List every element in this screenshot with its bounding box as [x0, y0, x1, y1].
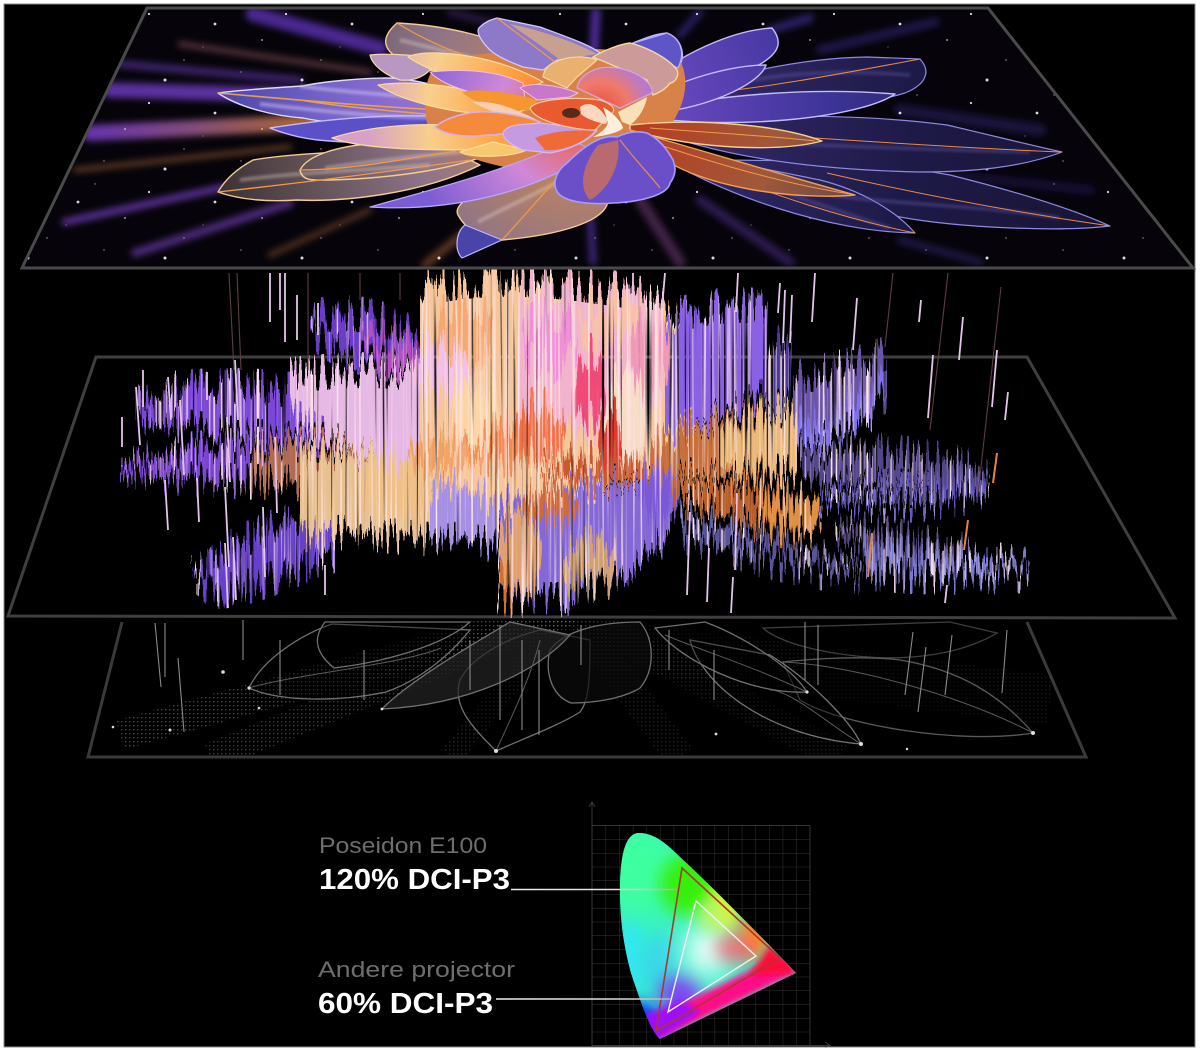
flower petals, back to front	[218, 18, 1110, 258]
petal: peach tier	[472, 102, 537, 122]
petal: curl orange centre	[535, 131, 594, 150]
petal: blue crown	[633, 33, 682, 68]
panel frame: middle layer	[8, 357, 1175, 618]
vein: central blue	[620, 140, 660, 188]
petals: dark back	[640, 57, 1110, 233]
petal: top lavender	[478, 18, 600, 70]
petal: central blue	[555, 132, 675, 204]
panel: middle layer, extruded flower bars	[8, 273, 1175, 618]
petal: right lilac small	[370, 54, 440, 80]
petals: warm and brown right	[630, 122, 822, 148]
extruded colour bars	[120, 279, 1030, 604]
petals: cool back	[218, 28, 895, 142]
petal: pink small	[520, 85, 578, 100]
label: Poseidon E100: Poseidon E100	[319, 833, 487, 858]
horseshoe colour gamut	[620, 833, 796, 1039]
light rays	[65, 12, 1090, 265]
petal: orange tier	[462, 90, 537, 110]
vertical spikes	[155, 620, 1007, 735]
petal: top lavender warm fold	[510, 24, 597, 60]
panel: bottom layer, detail outlines	[88, 610, 1086, 757]
star field	[22, 8, 1193, 268]
value: 120% DCI-P3: 120% DCI-P3	[319, 864, 510, 896]
petals: taupe translucent	[218, 23, 607, 240]
petal: red crown	[577, 67, 652, 108]
inner triangle: other projector	[668, 901, 756, 1012]
petals: lower fan	[370, 140, 594, 208]
centre: flower heart	[530, 97, 647, 137]
panel fill: top layer	[22, 8, 1193, 268]
chart axes	[589, 802, 830, 1047]
flower outlines	[249, 622, 1033, 751]
vein: long left petal	[218, 93, 500, 120]
flower base: fills gaps behind inner petals	[425, 48, 685, 174]
veins: taupe petals	[218, 23, 570, 240]
chart grid	[592, 826, 810, 1046]
petal: bottom blue	[457, 225, 502, 258]
petal: lavender curl	[503, 123, 597, 153]
dotted rays	[120, 610, 1050, 757]
sheen: long left petal	[260, 86, 450, 118]
glint points	[112, 670, 1035, 753]
panel frame: top layer	[22, 8, 1193, 268]
sheen: taupe petals	[240, 40, 570, 222]
value: 60% DCI-P3: 60% DCI-P3	[318, 988, 493, 1020]
petal: lilac tier	[430, 70, 525, 100]
petal inner veins	[249, 635, 1033, 751]
panel: top layer, full colour flower image	[22, 8, 1193, 268]
vein: top lavender	[497, 18, 555, 62]
sheen: dark petals	[720, 72, 1060, 228]
orange spikes	[868, 453, 997, 577]
petals: warm tiers	[332, 53, 543, 156]
outer triangle: Poseidon E100	[656, 868, 780, 1031]
leader line: 60%	[496, 998, 671, 1000]
petal: right crown	[593, 43, 678, 95]
petal veins: dark petals	[650, 59, 1110, 233]
chart: CIE gamut diagram	[496, 802, 830, 1047]
veins: orange long right	[650, 128, 850, 194]
petal: central blue warm fold	[583, 140, 619, 200]
petal: orange and lavender lobe	[435, 112, 540, 136]
petal: brown long right	[630, 130, 855, 196]
panel frame: bottom layer	[88, 622, 1086, 757]
dim drop lines	[229, 273, 1001, 503]
petal: peach crown	[543, 57, 597, 88]
leader line: 120%	[511, 888, 677, 890]
pink and white spikes	[122, 273, 1008, 613]
label: Andere projector: Andere projector	[318, 957, 515, 982]
